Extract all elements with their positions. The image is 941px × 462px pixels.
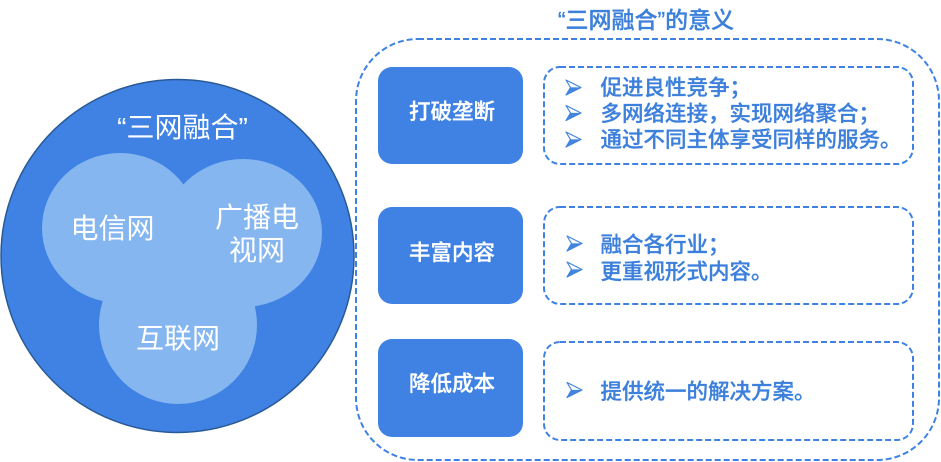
panel: outer dashed frame bbox=[356, 39, 939, 460]
heading: meaning: “三网融合”的意义 bbox=[558, 7, 734, 33]
text: break monopoly points bbox=[566, 76, 902, 152]
text: break monopoly points: 通过不同主体享受同样的服务。 bbox=[600, 128, 902, 152]
row: rich content bbox=[378, 207, 913, 304]
text: rich content points bbox=[567, 233, 773, 284]
label: broadcast network: 视网 bbox=[229, 235, 285, 266]
text: rich content points: 融合各行业； bbox=[600, 233, 730, 257]
dashed box: break monopoly points bbox=[544, 67, 913, 164]
venn circle: telecom network bbox=[42, 153, 198, 303]
button: reduce cost bbox=[378, 339, 523, 437]
label: broadcast network: 广播电 bbox=[215, 202, 299, 233]
row: break monopoly bbox=[378, 67, 913, 164]
button: rich content: 丰富内容 bbox=[409, 241, 495, 265]
venn circle: broadcast network bbox=[164, 159, 322, 307]
label: broadcast network bbox=[215, 202, 299, 266]
venn center fill bbox=[105, 186, 250, 305]
button: break monopoly: 打破垄断 bbox=[409, 100, 495, 124]
text: break monopoly points: 促进良性竞争； bbox=[600, 76, 751, 100]
label: telecom network: 电信网 bbox=[70, 213, 155, 244]
panel: venn diagram bbox=[1, 80, 354, 432]
text: reduce cost points: 提供统一的解决方案。 bbox=[600, 380, 816, 404]
button: break monopoly bbox=[378, 67, 523, 164]
venn title: “三网融合” bbox=[117, 112, 248, 143]
text: break monopoly points: 多网络连接，实现网络聚合； bbox=[600, 101, 880, 126]
row: reduce cost bbox=[378, 339, 913, 440]
dashed box: reduce cost points bbox=[544, 342, 913, 440]
text: rich content points: 更重视形式内容。 bbox=[600, 260, 773, 284]
dashed box: rich content points bbox=[544, 207, 913, 304]
outer circle bbox=[1, 80, 354, 432]
venn circle: internet bbox=[99, 246, 257, 404]
button: reduce cost: 降低成本 bbox=[409, 372, 495, 396]
label: internet: 互联网 bbox=[136, 323, 220, 354]
button: rich content bbox=[378, 207, 523, 304]
